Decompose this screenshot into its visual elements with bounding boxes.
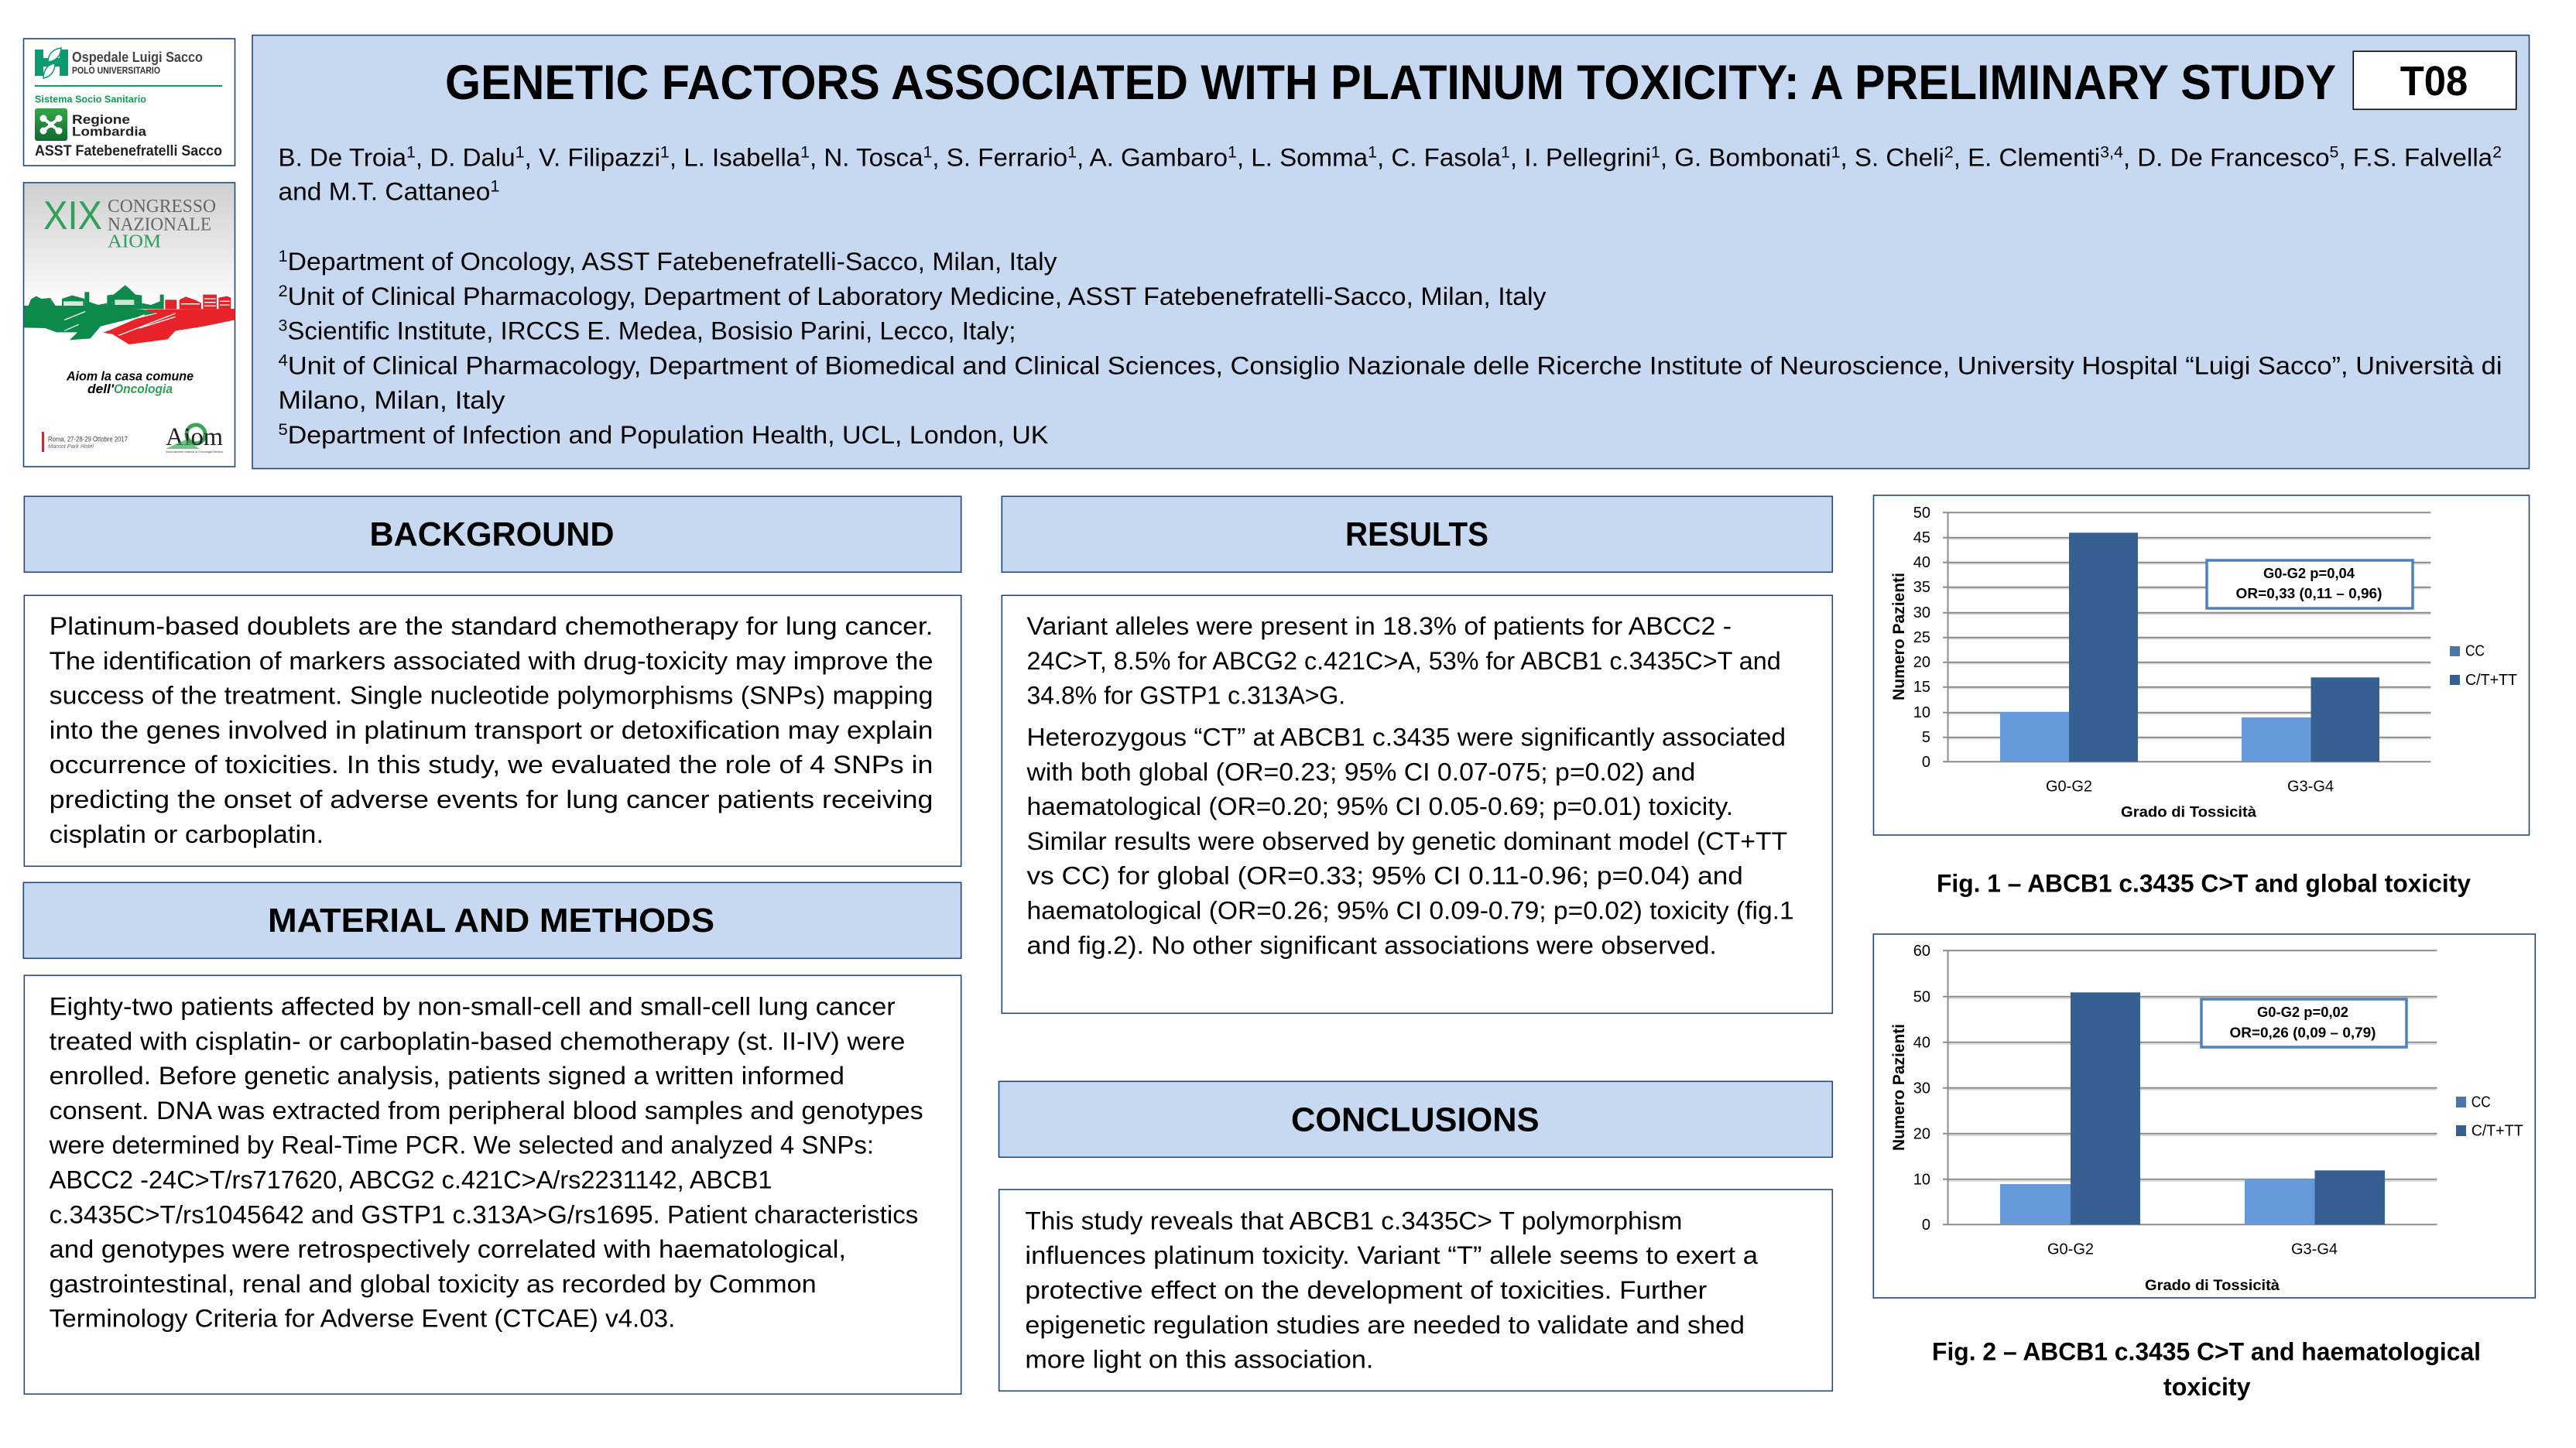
x axis labels: G3-G4 xyxy=(2287,779,2334,796)
heading: conclusions xyxy=(999,1081,1832,1157)
x axis labels: G3-G4 xyxy=(2291,1241,2338,1258)
y axis labels: 35 xyxy=(1913,579,1930,596)
panel: results text: Variant alleles were present in 18.3% of patients for ABCC2 - xyxy=(1026,612,1732,640)
heading: material and methods: MATERIAL AND METHODS xyxy=(268,902,714,940)
heading: background: BACKGROUND xyxy=(370,515,615,553)
legend: C/T+TT xyxy=(2472,1123,2523,1140)
panel: conclusions text: This study reveals that ABCB1 c.3435C> T polymorphism xyxy=(1025,1207,1682,1234)
hospital name: POLO UNIVERSITARIO xyxy=(72,65,160,76)
heading: results: RESULTS xyxy=(1345,515,1488,553)
y axis labels: 0 xyxy=(1922,754,1930,771)
poster code: T08 xyxy=(2400,58,2468,104)
callout: odds ratio: OR=0,26 (0,09 – 0,79) xyxy=(2229,1025,2376,1041)
affiliations: Milano, Milan, Italy xyxy=(279,386,505,414)
y axis labels: 40 xyxy=(1913,554,1930,571)
panel: results text: Similar results were observed by genetic dominant model (CT+TT xyxy=(1026,827,1787,855)
icon: Regione Lombardia rose xyxy=(35,108,67,141)
panel: background text: The identification of markers associated with drug-toxicity may improve the xyxy=(50,647,933,675)
system label: Sistema Socio Sanitario xyxy=(35,93,146,105)
logo panel: XIX Congresso Nazionale AIOM xyxy=(23,183,235,467)
y axis title: Numero Pazienti xyxy=(1890,573,1908,700)
panel: conclusions text: epigenetic regulation studies are needed to validate and shed xyxy=(1025,1311,1745,1339)
trust name: ASST Fatebenefratelli Sacco xyxy=(35,143,222,159)
affiliations: 1Department of Oncology, ASST Fatebenefratelli-Sacco, Milan, Italy xyxy=(279,248,1057,276)
x axis labels xyxy=(2046,779,2334,796)
bars xyxy=(2000,992,2385,1224)
x axis title: Grado di Tossicità xyxy=(2145,1278,2280,1294)
region name: Lombardia xyxy=(72,124,147,139)
y axis labels: 20 xyxy=(1913,654,1930,671)
heading: material and methods xyxy=(23,882,961,958)
panel: conclusions text: more light on this association. xyxy=(1025,1346,1373,1374)
authors xyxy=(279,143,2502,205)
motto: Aiom la casa comune xyxy=(66,368,194,384)
affiliations: 2Unit of Clinical Pharmacology, Department of Laboratory Medicine, ASST Fatebenefratelli-Sacco, Milan, Italy xyxy=(279,282,1547,310)
panel: results text: vs CC) for global (OR=0.33; 95% CI 0.11-0.96; p=0.04) and xyxy=(1026,862,1743,890)
legend: CC xyxy=(2465,643,2485,660)
panel: material and methods text: gastrointestinal, renal and global toxicity as recorded by Common xyxy=(50,1270,817,1298)
venue and date xyxy=(42,432,128,452)
congress name: CONGRESSO xyxy=(108,197,216,217)
panel: background text: cisplatin or carboplatin. xyxy=(50,820,324,848)
panel: material and methods text: Eighty-two patients affected by non-small-cell and small-cell lung cancer xyxy=(50,992,896,1020)
panel: material and methods text: Terminology Criteria for Adverse Event (CTCAE) v4.03. xyxy=(50,1305,675,1333)
y axis title: Numero Pazienti xyxy=(1890,1024,1908,1151)
chart: figure 2 bar chart xyxy=(1873,934,2535,1298)
motto xyxy=(66,368,194,396)
y axis labels: 5 xyxy=(1922,729,1930,746)
caption: figure 1: Fig. 1 – ABCB1 c.3435 C>T and global toxicity xyxy=(1937,870,2471,898)
affiliations xyxy=(279,248,2502,449)
y axis labels: 0 xyxy=(1922,1217,1930,1234)
x axis labels xyxy=(2047,1241,2338,1258)
x axis labels: G0-G2 xyxy=(2047,1241,2094,1258)
panel: background text: into the genes involved in platinum transport or detoxification may explain xyxy=(50,716,933,744)
region name: Regione xyxy=(72,112,130,127)
y axis labels: 50 xyxy=(1913,505,1930,522)
motto: Oncologia xyxy=(114,382,173,396)
panel: conclusions text: influences platinum toxicity. Variant “T” allele seems to exert a xyxy=(1025,1241,1759,1269)
y axis labels: 20 xyxy=(1913,1125,1930,1142)
panel: material and methods text: treated with cisplatin- or carboplatin-based chemotherapy (st. II-IV) were xyxy=(50,1027,905,1055)
affiliations: 3Scientific Institute, IRCCS E. Medea, Bosisio Parini, Lecco, Italy; xyxy=(279,317,1016,345)
callout: odds ratio: G0-G2 p=0,02 xyxy=(2257,1005,2348,1020)
y axis labels: 60 xyxy=(1913,943,1930,960)
panel: material and methods text xyxy=(24,975,961,1394)
panel: background text xyxy=(24,595,961,866)
panel: background text: success of the treatment. Single nucleotide polymorphisms (SNPs) mapping xyxy=(50,682,933,710)
caption: figure 2 xyxy=(1932,1337,2481,1401)
panel: material and methods text: c.3435C>T/rs1045642 and GSTP1 c.313A>G/rs1695. Patient characteristics xyxy=(50,1200,918,1228)
venue and date: Marriot Park Hotel xyxy=(48,444,94,450)
panel: results text: haematological (OR=0.20; 95% CI 0.05-0.69; p=0.01) toxicity. xyxy=(1026,792,1733,820)
caption: figure 2: toxicity xyxy=(2163,1373,2251,1401)
panel: results text: haematological (OR=0.26; 95% CI 0.09-0.79; p=0.02) toxicity (fig.1 xyxy=(1026,896,1794,924)
panel: material and methods text: enrolled. Before genetic analysis, patients signed a written informed xyxy=(50,1062,844,1090)
y axis labels xyxy=(1913,505,1930,771)
panel: background text: predicting the onset of adverse events for lung cancer patients receiving xyxy=(50,786,933,813)
callout: odds ratio: OR=0,33 (0,11 – 0,96) xyxy=(2235,586,2382,601)
panel: results text: Heterozygous “CT” at ABCB1 c.3435 were significantly associated xyxy=(1026,723,1786,751)
illustration: Rome skyline and Italian flag brush xyxy=(24,285,235,344)
y axis labels: 40 xyxy=(1913,1034,1930,1051)
chart: figure 1 bar chart xyxy=(1873,495,2530,835)
panel: results text: 34.8% for GSTP1 c.313A>G. xyxy=(1026,682,1345,710)
title: GENETIC FACTORS ASSOCIATED WITH PLATINUM TOXICITY: A PRELIMINARY STUDY xyxy=(445,56,2336,110)
panel: results text: and fig.2). No other significant associations were observed. xyxy=(1026,931,1717,959)
heading: conclusions: CONCLUSIONS xyxy=(1291,1101,1539,1139)
y axis labels: 10 xyxy=(1913,704,1930,721)
callout: odds ratio: G0-G2 p=0,04 xyxy=(2263,566,2355,581)
icon: AIOM logo: Aiom xyxy=(166,423,223,451)
x axis title: Grado di Tossicità xyxy=(2121,805,2256,821)
y axis labels: 50 xyxy=(1913,989,1930,1006)
y axis labels xyxy=(1913,943,1930,1234)
y axis labels: 30 xyxy=(1913,1080,1930,1097)
hospital name: Ospedale Luigi Sacco xyxy=(72,50,203,65)
affiliations: 4Unit of Clinical Pharmacology, Department of Biomedical and Clinical Sciences, Consiglio Nazionale delle Ricerche Institute of Neuroscience, University Hospital “Luigi Sacco”, Università di xyxy=(279,351,2502,379)
congress name: AIOM xyxy=(108,232,161,252)
panel: material and methods text: consent. DNA was extracted from peripheral blood samples and genotypes xyxy=(50,1097,923,1125)
panel: results text: 24C>T, 8.5% for ABCG2 c.421C>A, 53% for ABCB1 c.3435C>T and xyxy=(1026,647,1781,675)
callout: odds ratio xyxy=(2207,560,2413,608)
poster code xyxy=(2353,51,2516,109)
panel: conclusions text: protective effect on the development of toxicities. Further xyxy=(1025,1276,1707,1304)
panel: material and methods text: and genotypes were retrospectively correlated with haematological, xyxy=(50,1235,846,1263)
y axis labels: 30 xyxy=(1913,604,1930,621)
logo panel: Ospedale Luigi Sacco and Regione Lombardia xyxy=(23,39,235,166)
icon: Sacco hospital mark xyxy=(35,48,68,78)
y axis labels: 15 xyxy=(1913,679,1930,696)
authors: and M.T. Cattaneo 1 xyxy=(279,177,500,205)
heading: results xyxy=(1002,496,1832,572)
congress name xyxy=(108,197,216,252)
venue and date: Roma, 27-28-29 Ottobre 2017 xyxy=(48,435,128,443)
motto: dell' xyxy=(87,382,115,396)
legend: CC xyxy=(2472,1094,2491,1111)
congress numeral: XIX xyxy=(43,193,102,238)
x axis labels: G0-G2 xyxy=(2046,779,2092,796)
y axis labels: 10 xyxy=(1913,1172,1930,1189)
panel: material and methods text: ABCC2 -24C>T/rs717620, ABCG2 c.421C>A/rs2231142, ABCB1 xyxy=(50,1166,772,1193)
panel: background text: occurrence of toxicities. In this study, we evaluated the role of 4 SNPs in xyxy=(50,751,933,779)
affiliations: 5Department of Infection and Population Health, UCL, London, UK xyxy=(279,421,1049,449)
hospital name xyxy=(72,50,203,76)
callout: odds ratio xyxy=(2201,999,2406,1047)
panel: conclusions text xyxy=(999,1190,1832,1391)
region name xyxy=(72,112,147,139)
panel: results text xyxy=(1002,595,1832,1013)
bars xyxy=(2000,532,2379,762)
panel: background text: Platinum-based doublets are the standard chemotherapy for lung cancer. xyxy=(50,612,933,640)
y axis labels: 45 xyxy=(1913,529,1930,546)
y axis labels: 25 xyxy=(1913,629,1930,646)
panel: results text: with both global (OR=0.23; 95% CI 0.07-075; p=0.02) and xyxy=(1026,758,1695,786)
caption: figure 2: Fig. 2 – ABCB1 c.3435 C>T and haematological xyxy=(1932,1337,2481,1365)
panel: header xyxy=(252,36,2530,469)
heading: background xyxy=(24,496,961,572)
legend xyxy=(2456,1094,2523,1140)
legend xyxy=(2450,643,2517,689)
authors: B. De Troia1, D. Dalu1, V. Filipazzi1, L. Isabella1, N. Tosca1, S. Ferrario1, A. Gambaro1, L. Somma1, C. Fasola1, I. Pellegrini1, G. Bombonati1, S. Cheli2, E. Clementi3,4, D. De Francesco5, F.S. Falvella2 xyxy=(279,143,2502,171)
congress name: NAZIONALE xyxy=(108,215,211,235)
icon: AIOM logo: Associazione Italiana di Oncologia Medica xyxy=(166,450,224,454)
legend: C/T+TT xyxy=(2465,672,2517,689)
panel: material and methods text: were determined by Real-Time PCR. We selected and analyzed 4 SNPs: xyxy=(49,1131,874,1159)
